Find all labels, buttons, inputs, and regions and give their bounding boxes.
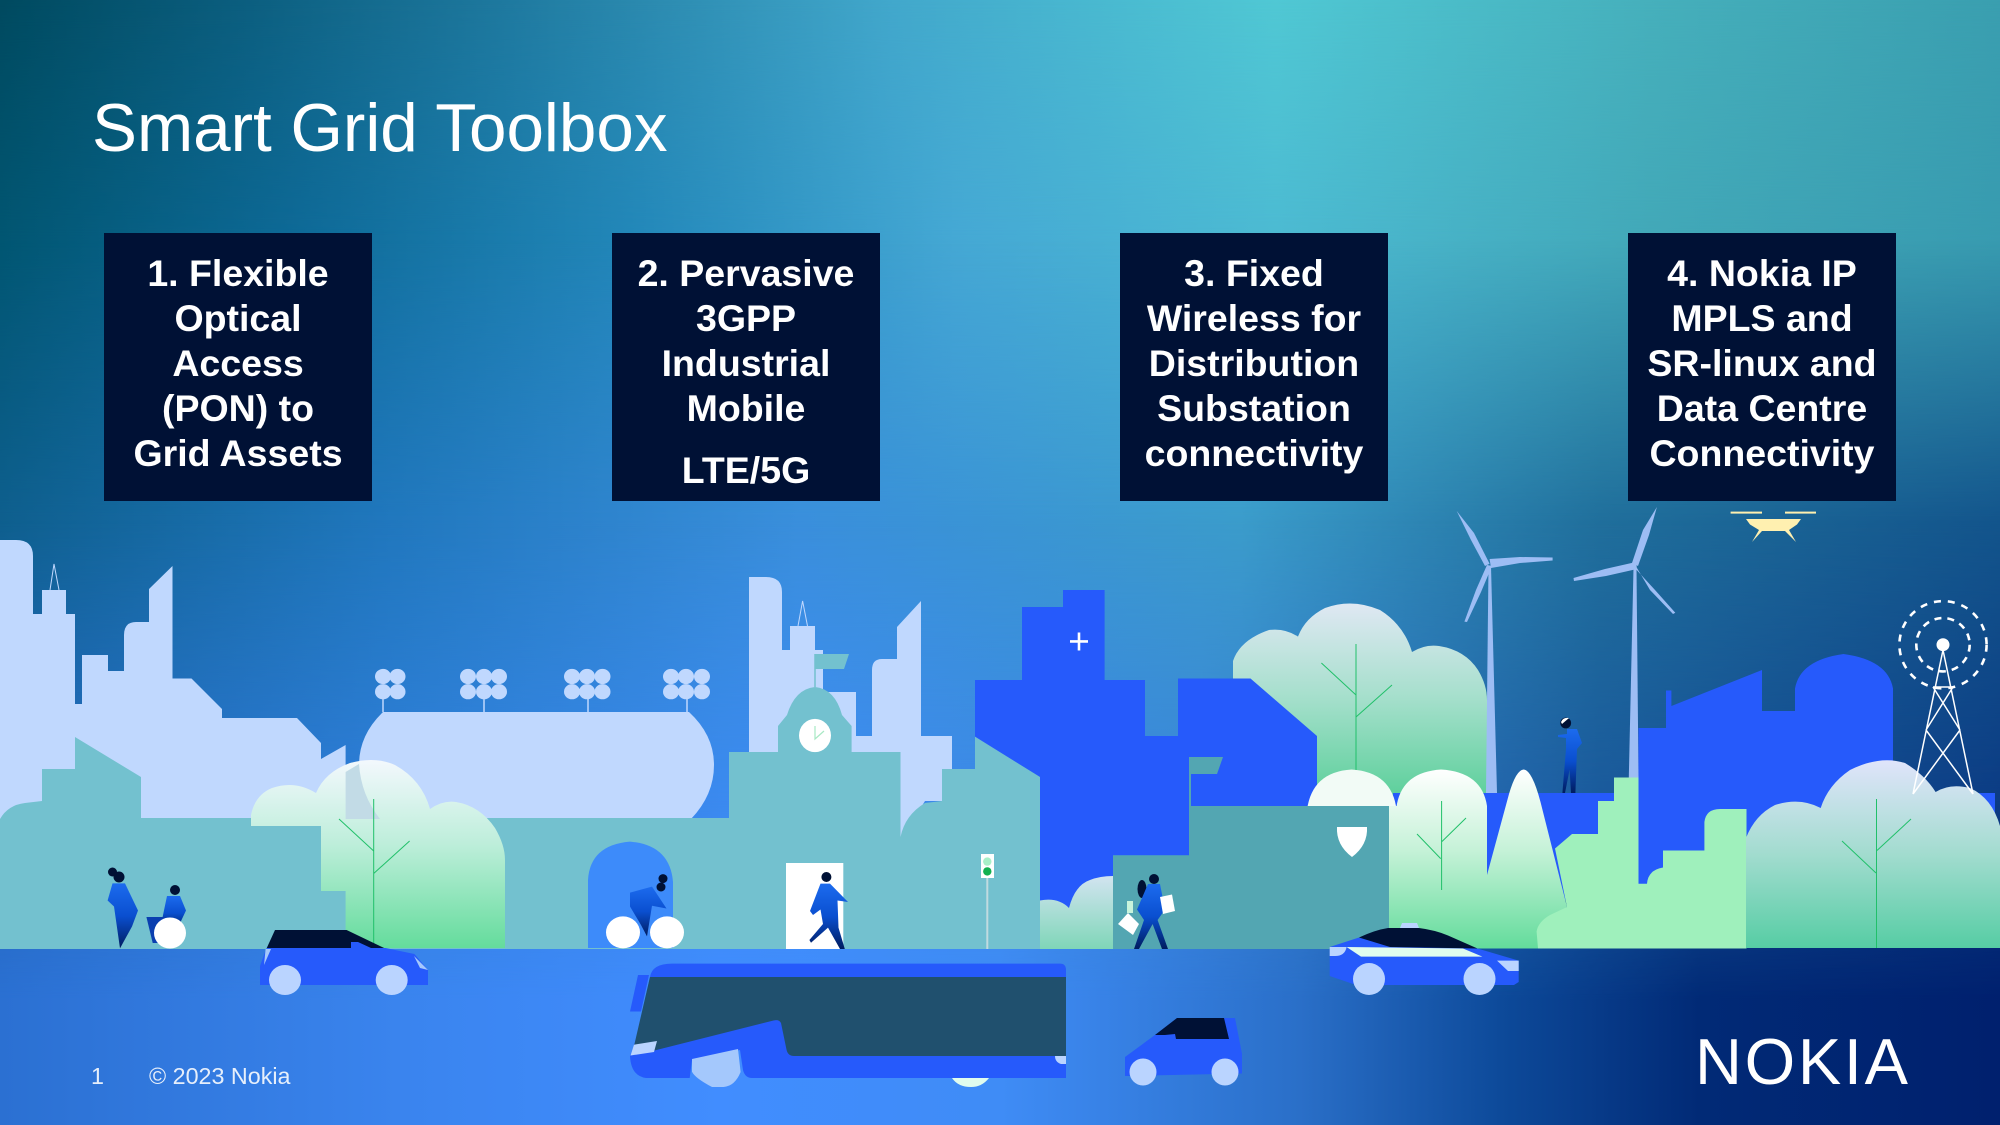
- box 2: pervasive 3GPP: Industrial: [662, 342, 830, 384]
- bus: [630, 964, 1066, 1087]
- box 2: pervasive 3GPP: 2. Pervasive: [638, 252, 854, 294]
- box 1: flexible optical access: Optical: [174, 297, 302, 339]
- person with phone: [1558, 718, 1582, 793]
- box 4: Nokia IP MPLS: [1628, 233, 1896, 501]
- box 4: Nokia IP MPLS: 4. Nokia IP: [1667, 252, 1857, 294]
- box 3: fixed wireless: Wireless for: [1147, 297, 1361, 339]
- car small: [1125, 1018, 1242, 1086]
- left skyline: [0, 540, 346, 819]
- box 4: Nokia IP MPLS: Connectivity: [1649, 432, 1875, 474]
- title: Smart Grid Toolbox: [92, 91, 668, 166]
- blue buildings: [975, 590, 1995, 949]
- car right: [1330, 923, 1519, 995]
- wheelchair user: [146, 885, 186, 948]
- box 2: pervasive 3GPP: LTE/5G: [682, 448, 810, 490]
- police station: [1113, 757, 1389, 949]
- teal old town: [0, 687, 1040, 949]
- woman walking: [108, 868, 138, 948]
- box 4: Nokia IP MPLS: MPLS and: [1671, 297, 1853, 339]
- hospital cross: [1070, 632, 1088, 650]
- box 3: fixed wireless: connectivity: [1145, 432, 1363, 474]
- box 2: pervasive 3GPP: 3GPP: [696, 297, 796, 339]
- archway: [588, 842, 673, 948]
- clock tower flag: [815, 654, 849, 687]
- wind turbines: [1457, 507, 1675, 793]
- box 1: flexible optical access: Access: [172, 342, 304, 384]
- clock: [799, 719, 831, 752]
- radio tower: [1899, 601, 1987, 794]
- box 3: fixed wireless: Substation: [1157, 387, 1351, 429]
- box 3: fixed wireless: Distribution: [1149, 342, 1359, 384]
- box 1: flexible optical access: Grid Assets: [133, 432, 343, 474]
- copyright: © 2023 Nokia: [149, 1063, 290, 1089]
- box 3: fixed wireless: [1120, 233, 1388, 501]
- box 3: fixed wireless: 3. Fixed: [1184, 252, 1324, 294]
- man walking through door: [809, 872, 848, 949]
- mint terraces: [1537, 778, 1746, 948]
- box 4: Nokia IP MPLS: SR-linux and: [1647, 342, 1877, 384]
- box 1: flexible optical access: 1. Flexible: [147, 252, 329, 294]
- centre skyline: [749, 577, 952, 841]
- traffic light: [981, 854, 994, 949]
- page number: 1: [91, 1063, 104, 1089]
- door: [786, 863, 843, 949]
- car left: [260, 930, 428, 995]
- stadium with floodlights: [359, 669, 714, 819]
- small bush: [1040, 876, 1113, 949]
- box 1: flexible optical access: [104, 233, 372, 501]
- box 2: pervasive 3GPP: [612, 233, 880, 501]
- box 4: Nokia IP MPLS: Data Centre: [1657, 387, 1867, 429]
- woman with shopping bags: [1118, 874, 1175, 949]
- left tree: [251, 760, 505, 948]
- Nokia logo: NOKIA: [1695, 1025, 1909, 1098]
- small white trees and cone tree: [1307, 770, 1567, 948]
- drone: [1731, 512, 1816, 542]
- cyclist: [606, 874, 684, 948]
- box 2: pervasive 3GPP: Mobile: [687, 387, 805, 429]
- right tree: [1746, 760, 2000, 948]
- box 1: flexible optical access: (PON) to: [162, 387, 314, 429]
- back tree: [1233, 603, 1487, 795]
